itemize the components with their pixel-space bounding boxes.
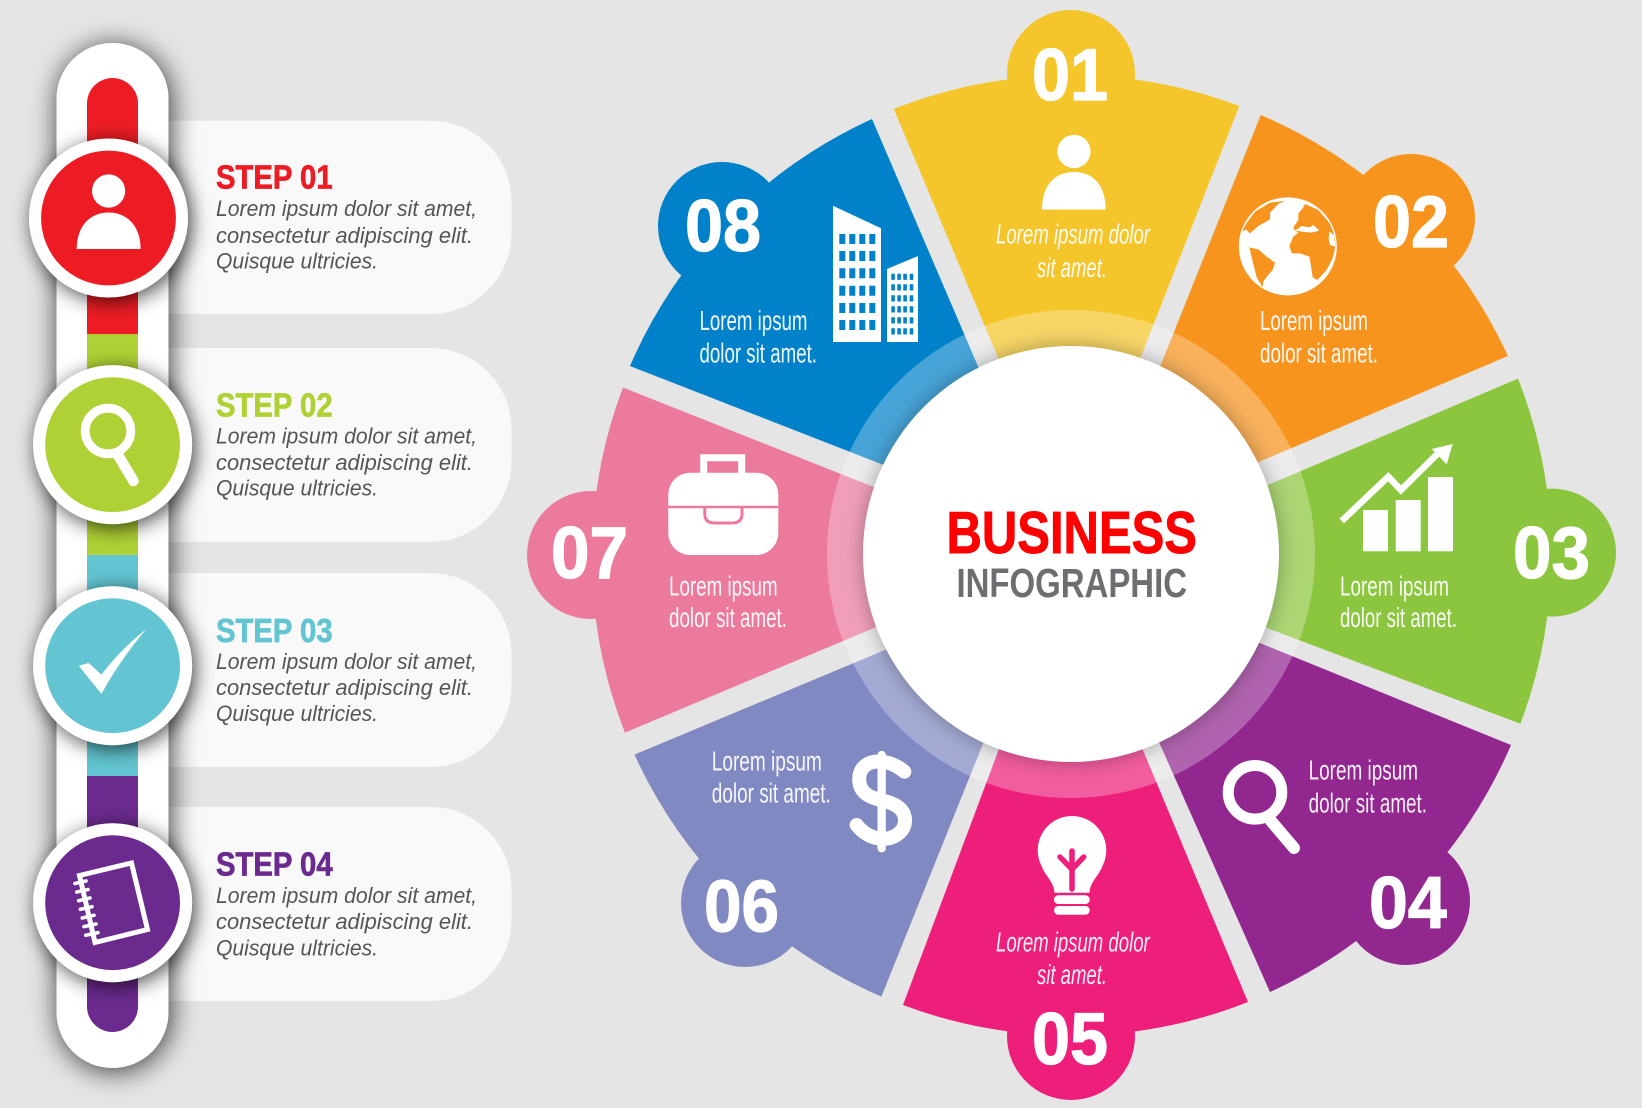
segment 04 content: dolor sit amet. <box>1309 788 1427 819</box>
segment 06 content: 06 <box>704 866 779 948</box>
icon: growth chart <box>1342 444 1453 551</box>
text block: step 02: Quisque ultricies. <box>216 476 378 501</box>
text block: step 01 <box>216 159 477 274</box>
text block: step 03 <box>216 612 477 726</box>
segment 03 content: dolor sit amet. <box>1340 602 1457 633</box>
title: INFOGRAPHIC <box>956 560 1187 606</box>
icon: office buildings <box>833 206 918 342</box>
text block: step 01: Lorem ipsum dolor sit amet, <box>216 196 477 221</box>
icon: person <box>1042 135 1106 210</box>
segment 03 content <box>1340 444 1590 633</box>
segment 05 content: sit amet. <box>1037 959 1107 990</box>
segment 06 content: dolor sit amet. <box>712 778 831 809</box>
icon: light bulb <box>1038 816 1106 915</box>
segment 06 content: Lorem ipsum <box>712 746 822 777</box>
segment 03 content: 03 <box>1513 513 1590 594</box>
segment 02 content <box>1239 182 1449 368</box>
text block: step 03: Quisque ultricies. <box>216 701 378 726</box>
text block: step 04: Lorem ipsum dolor sit amet, <box>216 883 477 908</box>
segment 08 content <box>685 186 918 368</box>
icon: magnifier <box>85 408 134 481</box>
text block: step 04: Quisque ultricies. <box>216 936 378 961</box>
card: step 04 <box>150 807 512 1001</box>
segment 06 content <box>704 746 905 948</box>
text block: step 04: STEP 04 <box>216 846 333 883</box>
text block: step 03: STEP 03 <box>216 612 333 649</box>
text block: step 04 <box>216 846 477 961</box>
wheel segment 05 <box>903 725 1248 1100</box>
text block: step 03: Lorem ipsum dolor sit amet, <box>216 649 477 674</box>
segment 01 content: 01 <box>1032 35 1108 116</box>
card: step 03 <box>150 573 512 767</box>
centre circle <box>863 346 1279 762</box>
title <box>946 500 1197 606</box>
wheel segment 07 <box>527 388 890 733</box>
icon: magnifier <box>1228 766 1294 848</box>
wheel segment 04 <box>1147 635 1511 992</box>
text block: step 03: consectetur adipiscing elit. <box>216 675 473 700</box>
text block: step 01: Quisque ultricies. <box>216 249 378 274</box>
segment 07 content: Lorem ipsum <box>669 570 778 602</box>
segment 02 content: Lorem ipsum <box>1260 305 1368 336</box>
segment 01 content: Lorem ipsum dolor <box>996 219 1151 250</box>
segment 04 content: Lorem ipsum <box>1309 754 1418 786</box>
segment 08 content: Lorem ipsum <box>700 305 808 336</box>
segment 05 content: Lorem ipsum dolor <box>996 926 1151 957</box>
step 02 icon badge <box>33 365 192 524</box>
segment 05 content: 05 <box>1032 999 1108 1080</box>
wheel segment 08 <box>630 119 986 471</box>
segment 08 content: dolor sit amet. <box>700 338 817 368</box>
segment 07 content: 07 <box>551 513 628 594</box>
icon: person <box>77 174 141 249</box>
segment 07 content: dolor sit amet. <box>669 602 787 633</box>
wheel segment 01 <box>894 10 1239 380</box>
title: BUSINESS <box>946 500 1197 566</box>
timeline track <box>56 43 168 1068</box>
segment 02 content: dolor sit amet. <box>1260 338 1378 368</box>
panel: step cards <box>150 121 512 1001</box>
card: step 02 <box>150 348 512 542</box>
icon: globe <box>1239 197 1337 295</box>
icon: briefcase <box>668 458 778 555</box>
text block: step 02 <box>216 386 477 501</box>
segment 07 content <box>551 458 787 633</box>
text block: step 02: Lorem ipsum dolor sit amet, <box>216 424 477 449</box>
icon: check mark <box>79 629 146 694</box>
text block: step 02: STEP 02 <box>216 386 333 423</box>
segment 01 content: sit amet. <box>1037 252 1107 283</box>
text block: step 02: consectetur adipiscing elit. <box>216 450 473 475</box>
step 03 icon badge <box>33 586 192 745</box>
segment 01 content <box>996 35 1151 283</box>
wheel segment 06 <box>634 644 990 997</box>
step 04 icon badge <box>33 823 192 982</box>
card: step 01 <box>150 121 512 314</box>
icon: notebook <box>75 863 148 942</box>
wheel segment 02 <box>1151 115 1508 470</box>
step 01 icon badge <box>29 138 188 298</box>
wheel segment 03 <box>1250 379 1616 724</box>
segment 08 content: 08 <box>685 186 761 267</box>
text block: step 04: consectetur adipiscing elit. <box>216 909 473 934</box>
text block: step 01: consectetur adipiscing elit. <box>216 223 473 248</box>
segment 02 content: 02 <box>1373 182 1449 263</box>
icon: dollar sign <box>857 755 905 848</box>
timeline colour bar <box>87 78 138 1032</box>
segment 04 content: 04 <box>1369 863 1447 944</box>
translucent ring <box>827 310 1315 798</box>
text block: step 01: STEP 01 <box>216 159 333 196</box>
segment 04 content <box>1228 754 1447 944</box>
segment 05 content <box>996 816 1151 1080</box>
segment 03 content: Lorem ipsum <box>1340 570 1449 602</box>
